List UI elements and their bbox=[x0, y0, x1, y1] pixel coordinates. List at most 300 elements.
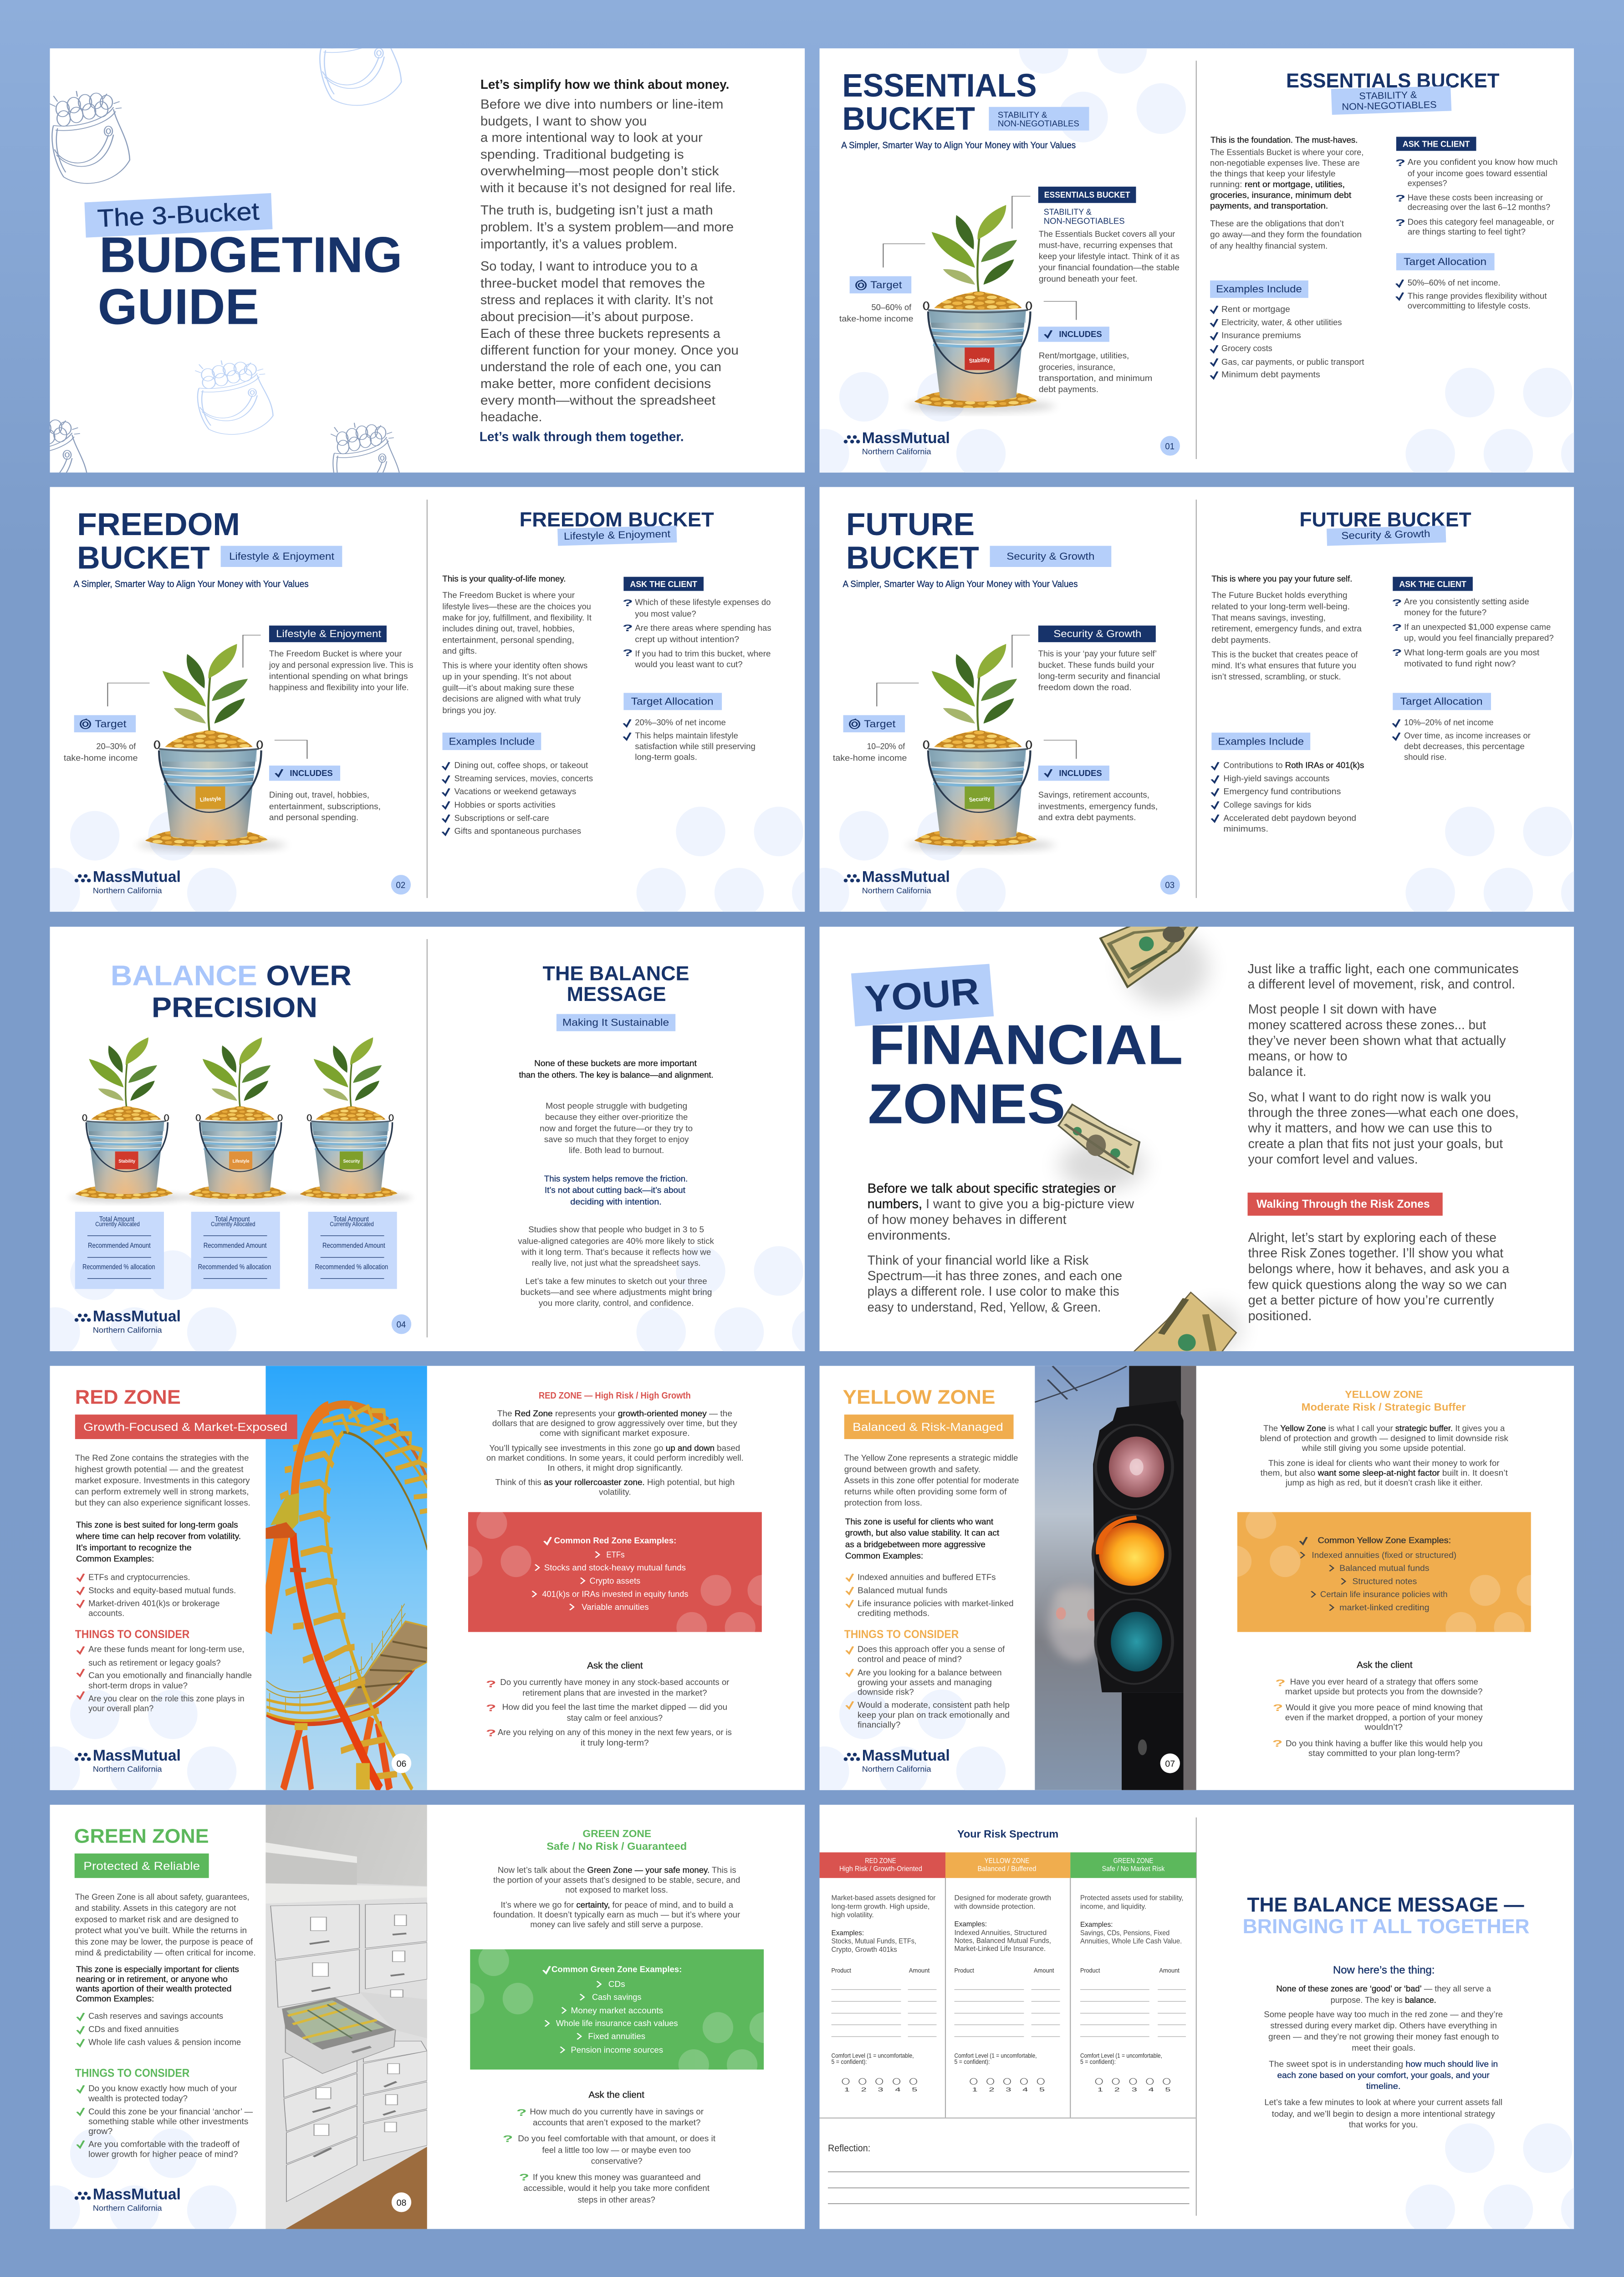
body text: groceries, insurance, minimum debt bbox=[1210, 190, 1352, 200]
three bucket illustrations bbox=[69, 1037, 412, 1203]
ask the client: expenses? bbox=[1408, 179, 1447, 188]
page number: 03 bbox=[1165, 880, 1175, 890]
green column: 5 bbox=[1165, 2087, 1171, 2093]
heading: right page: Security & Growth bbox=[1341, 528, 1430, 541]
red column: Examples: bbox=[832, 1929, 864, 1937]
checklist: common examples: CDs and fixed annuities bbox=[88, 2024, 179, 2034]
right text: Most people I sit down with have bbox=[1248, 1001, 1437, 1016]
heading: Protected & Reliable bbox=[83, 1860, 200, 1872]
zone column headers: Safe / No Market Risk bbox=[1102, 1864, 1165, 1873]
green column bbox=[1080, 1894, 1184, 2093]
connector lines bbox=[877, 635, 1076, 759]
ask the client: Ask the client bbox=[588, 2090, 644, 2100]
body text: market exposure. Investments in this category bbox=[75, 1475, 250, 1485]
yellow column: 5 bbox=[1039, 2087, 1045, 2093]
body text: related to your long-term well-being. bbox=[1211, 602, 1350, 611]
examples include list: Contributions to Roth IRAs or 401(k)s bbox=[1223, 761, 1364, 770]
callout: essentials bucket: ground beneath your feet. bbox=[1039, 274, 1138, 284]
callout: lifestyle and enjoyment: joy and personal expression live. This is bbox=[269, 660, 413, 670]
heading: right page: Lifestyle & Enjoyment bbox=[564, 528, 671, 542]
callout: lifestyle and enjoyment: intentional spending on what brings bbox=[269, 671, 408, 681]
red column: long-term growth. High upside, bbox=[832, 1902, 929, 1910]
body text: protection from loss. bbox=[844, 1498, 922, 1507]
checklist: common examples: crediting methods. bbox=[858, 1608, 929, 1618]
body text: The Future Bucket holds everything bbox=[1211, 590, 1348, 600]
logo bbox=[844, 1746, 950, 1774]
ask the client: stay committed to your plan long-term? bbox=[1308, 1748, 1460, 1758]
yellow column: Designed for moderate growth bbox=[954, 1894, 1051, 1902]
heading bbox=[843, 1386, 1014, 1439]
body text: buckets—and see where adjustments might bring bbox=[521, 1287, 712, 1297]
ask the client: crept up without intention? bbox=[635, 634, 739, 644]
left intro text bbox=[868, 1181, 1134, 1314]
red column: 3 bbox=[878, 2087, 883, 2093]
panel: your risk spectrum and balance message bbox=[820, 1805, 1610, 2234]
green column: 1 bbox=[1098, 2087, 1103, 2093]
allocation card: lifestyle: Recommended % allocation bbox=[198, 1263, 271, 1271]
callout: essentials bucket: ESSENTIALS BUCKET bbox=[1044, 190, 1130, 199]
examples include list bbox=[1210, 281, 1364, 379]
things to consider: such as retirement or legacy goals? bbox=[88, 1658, 221, 1668]
allocation card: security: Total Amount bbox=[333, 1215, 369, 1223]
callout: essentials bucket bbox=[1038, 187, 1180, 284]
closing text bbox=[1248, 1230, 1509, 1323]
title: FINANCIAL bbox=[869, 1013, 1183, 1076]
body text: and stability. Assets in this category are not bbox=[75, 1903, 236, 1913]
panel: red zone bbox=[31, 1366, 805, 1796]
yellow column: Amount bbox=[1034, 1967, 1054, 1974]
yellow column: 5 = confident): bbox=[954, 2058, 990, 2066]
body text: This is where you pay your future self. bbox=[1211, 574, 1352, 583]
ask the client: it truly long-term? bbox=[581, 1738, 649, 1747]
body text: deciding with intention. bbox=[570, 1197, 662, 1206]
heading: OVER bbox=[266, 960, 352, 991]
right intro text: come with significant market exposure. bbox=[540, 1428, 690, 1438]
body text bbox=[518, 1058, 714, 1308]
yellow column: 1 bbox=[972, 2087, 978, 2093]
things to consider: Are you comfortable with the tradeoff of bbox=[88, 2139, 240, 2149]
body text: growth, but also value stability. It can act bbox=[845, 1528, 1000, 1537]
callout: includes: INCLUDES bbox=[1059, 329, 1102, 339]
body text: The Red Zone contains the strategies with the bbox=[75, 1453, 249, 1463]
connector lines bbox=[883, 196, 1076, 320]
things to consider: THINGS TO CONSIDER bbox=[75, 1628, 189, 1640]
green column: 4 bbox=[1149, 2087, 1154, 2093]
body text: Let’s take a few minutes to sketch out your three bbox=[526, 1276, 707, 1286]
heading: the balance message bbox=[1243, 1893, 1530, 1938]
body text: the things that keep your lifestyle bbox=[1210, 169, 1335, 179]
ask the client: ? bbox=[1275, 1678, 1286, 1688]
page number bbox=[1160, 436, 1180, 456]
body text: Most people struggle with budgeting bbox=[546, 1101, 687, 1111]
heading: FUTURE bbox=[846, 507, 975, 542]
right text: balance it. bbox=[1248, 1064, 1307, 1079]
green column: 2 bbox=[1114, 2087, 1120, 2093]
examples include list: Examples Include bbox=[1218, 735, 1304, 747]
target allocation: This helps maintain lifestyle bbox=[635, 731, 738, 740]
callout: includes: transportation, and minimum bbox=[1039, 373, 1152, 383]
panel: common red zone examples bbox=[449, 1508, 778, 1643]
right intro text: Now let’s talk about the Green Zone — your safe money. This is bbox=[498, 1865, 736, 1875]
logo: Northern California bbox=[93, 1765, 162, 1774]
panel: essentials bucket bbox=[800, 24, 1610, 479]
heading bbox=[841, 67, 1089, 151]
body text: The Freedom Bucket is where your bbox=[442, 590, 575, 600]
logo: MassMutual bbox=[93, 868, 181, 885]
ask the client: ? bbox=[516, 2108, 527, 2118]
body text: because they either over-prioritize the bbox=[545, 1112, 688, 1122]
body text: It’s not about cutting back—it’s about bbox=[545, 1185, 685, 1195]
things to consider: grow? bbox=[88, 2126, 112, 2136]
heading: A Simpler, Smarter Way to Align Your Money with Your Values bbox=[843, 579, 1078, 589]
title: GUIDE bbox=[98, 279, 259, 335]
body text: mind. It’s what ensures that future you bbox=[1211, 661, 1356, 670]
green column: 5 = confident): bbox=[1080, 2058, 1116, 2066]
body text: That means savings, investing, bbox=[1211, 613, 1326, 623]
body text: exposed to market risk and are designed to bbox=[75, 1915, 239, 1924]
body text bbox=[442, 574, 592, 715]
heading: BALANCE bbox=[111, 960, 257, 991]
ask the client: steps in other areas? bbox=[578, 2195, 655, 2205]
panel: common green zone examples: Fixed annuities bbox=[588, 2032, 645, 2041]
body text bbox=[75, 1892, 256, 2003]
panel: cover The 3-Bucket Budgeting Guide bbox=[10, 13, 805, 504]
red column bbox=[832, 1894, 935, 2093]
callout: includes bbox=[269, 766, 381, 822]
red column: 5 = confident): bbox=[832, 2058, 867, 2066]
body text: and gifts. bbox=[442, 646, 477, 656]
body text: It’s important to recognize the bbox=[76, 1543, 192, 1552]
right intro text: them, but also want some sleep-at-night factor built in. It doesn’t bbox=[1261, 1468, 1508, 1478]
body text: wants aportion of their wealth protected bbox=[76, 1984, 231, 1993]
callout: includes: Savings, retirement accounts, bbox=[1038, 790, 1149, 800]
red column: 5 bbox=[912, 2087, 918, 2093]
body text: of any healthy financial system. bbox=[1210, 241, 1328, 250]
body text: isn’t stressed, scrambling, or stuck. bbox=[1211, 672, 1341, 681]
examples include list: Rent or mortgage bbox=[1221, 304, 1290, 314]
title bbox=[851, 964, 1183, 1135]
body text: includes dining out, travel, hobbies, bbox=[442, 624, 575, 633]
things to consider: Can you emotionally and financially handle bbox=[88, 1670, 252, 1680]
ask the client: money for the future? bbox=[1404, 608, 1486, 617]
heading: RED ZONE bbox=[75, 1386, 181, 1409]
reflection lines: Reflection: bbox=[828, 2143, 870, 2154]
red column: 4 bbox=[895, 2087, 901, 2093]
examples include list: Grocery costs bbox=[1221, 343, 1272, 353]
heading: Growth-Focused & Market-Exposed bbox=[83, 1421, 287, 1434]
right intro text bbox=[1260, 1389, 1508, 1487]
body text bbox=[844, 1453, 1019, 1561]
left intro text: Spectrum—it has three zones, and each one bbox=[868, 1268, 1122, 1283]
heading: the balance message: MESSAGE bbox=[567, 983, 666, 1006]
panel: common green zone examples: Common Green Zone Examples: bbox=[552, 1965, 682, 1974]
heading: right page bbox=[1286, 69, 1500, 115]
checklist: common examples: Whole life cash values & pension income bbox=[88, 2037, 241, 2047]
callout: walking through the risk zones: Walking Through the Risk Zones bbox=[1256, 1198, 1430, 1210]
panel: common yellow zone examples: Indexed annuities (fixed or structured) bbox=[1312, 1550, 1456, 1560]
callout: walking through the risk zones bbox=[1247, 1193, 1443, 1216]
allocation card: security: Recommended % allocation bbox=[315, 1263, 388, 1271]
left intro text: plays a different role. I use color to make this bbox=[868, 1284, 1119, 1299]
body text: running: rent or mortgage, utilities, bbox=[1210, 179, 1345, 189]
zone column headers: RED ZONE bbox=[865, 1857, 896, 1865]
heading: right page bbox=[1299, 508, 1471, 546]
worksheet title: Your Risk Spectrum bbox=[957, 1828, 1058, 1840]
left intro text: of how money behaves in different bbox=[868, 1212, 1067, 1227]
allocation card: security: Recommended Amount bbox=[322, 1241, 385, 1250]
callout: includes: INCLUDES bbox=[1059, 768, 1102, 778]
heading: Security & Growth bbox=[1006, 551, 1094, 562]
things to consider: lower growth for higher peace of mind? bbox=[88, 2149, 238, 2159]
intro text bbox=[480, 77, 739, 444]
checklist: common examples: Indexed annuities and buffered ETFs bbox=[858, 1572, 996, 1582]
body text: The sweet spot is in understanding how much should live in bbox=[1269, 2059, 1498, 2069]
title: BUDGETING bbox=[99, 227, 403, 283]
panel: common green zone examples: Pension income sources bbox=[571, 2045, 663, 2055]
bucket illustration: Security bbox=[969, 795, 991, 803]
right intro text bbox=[486, 1390, 744, 1497]
right intro text: You’ll typically see investments in this zone go up and down based bbox=[489, 1443, 740, 1453]
target allocation bbox=[1396, 253, 1547, 311]
examples include list: Examples Include bbox=[449, 735, 535, 747]
panel: common yellow zone examples: Structured notes bbox=[1352, 1577, 1417, 1586]
body text: Common Examples: bbox=[76, 1554, 154, 1563]
title: The 3-Bucket bbox=[97, 198, 260, 232]
callout: includes: Dining out, travel, hobbies, bbox=[269, 790, 369, 800]
body text: with it long term. That’s because it reflects how we bbox=[521, 1247, 711, 1257]
callout: essentials bucket: The Essentials Bucket covers all your bbox=[1039, 229, 1175, 239]
heading: Balanced & Risk-Managed bbox=[853, 1421, 1003, 1434]
body text: Now here’s the thing: bbox=[1333, 1964, 1435, 1976]
things to consider: Are these funds meant for long-term use, bbox=[88, 1644, 245, 1654]
yellow column: 3 bbox=[1006, 2087, 1011, 2093]
ask the client bbox=[1395, 137, 1558, 236]
ask the client: Ask the client bbox=[1357, 1660, 1413, 1670]
body text: Common Examples: bbox=[76, 1994, 154, 2003]
body text: that works for you. bbox=[1349, 2119, 1418, 2129]
body text bbox=[1211, 574, 1362, 681]
three bucket illustrations: Stability bbox=[118, 1159, 135, 1164]
body text: really live, not just what the spreadsheet says. bbox=[532, 1258, 700, 1268]
target allocation: 20%–30% of net income bbox=[635, 718, 726, 727]
right intro text: Think of this as your rollercoaster zone. High potential, but high bbox=[495, 1477, 735, 1487]
examples include list bbox=[442, 733, 593, 836]
body text: payments, and transportation. bbox=[1210, 201, 1328, 210]
heading: BUCKET bbox=[842, 100, 975, 137]
yellow column: Examples: bbox=[954, 1920, 987, 1928]
red column: Crypto, Growth 401ks bbox=[832, 1945, 897, 1953]
right intro text: The Red Zone represents your growth-oriented money — the bbox=[497, 1409, 732, 1418]
examples include list: Electricity, water, & other utilities bbox=[1221, 317, 1342, 327]
ask the client: ? bbox=[486, 1679, 496, 1690]
panel: common red zone examples: Crypto assets bbox=[590, 1576, 640, 1586]
page number: 07 bbox=[1165, 1758, 1175, 1769]
allocation card: stability bbox=[75, 1212, 164, 1289]
callout: includes: groceries, insurance, bbox=[1039, 362, 1115, 372]
logo: MassMutual bbox=[862, 1746, 950, 1764]
panel: common red zone examples: Variable annuities bbox=[582, 1602, 649, 1612]
logo: MassMutual bbox=[862, 429, 950, 446]
intro text: budgets, I want to show you bbox=[480, 114, 647, 128]
ask the client: ? bbox=[486, 1728, 496, 1739]
body text: Assets in this zone offer potential for moderate bbox=[844, 1475, 1019, 1485]
body text: make for joy, fulfillment, and flexibility. It bbox=[442, 613, 592, 623]
body text: timeline. bbox=[1366, 2081, 1401, 2091]
callout: includes: investments, emergency funds, bbox=[1038, 802, 1158, 811]
body text: but they can also experience significant losses. bbox=[75, 1498, 250, 1507]
intro text: headache. bbox=[480, 409, 542, 424]
heading: A Simpler, Smarter Way to Align Your Money with Your Values bbox=[74, 579, 309, 589]
panel: common green zone examples: Whole life insurance cash values bbox=[556, 2018, 678, 2028]
callout: lifestyle and enjoyment: The Freedom Bucket is where your bbox=[269, 649, 402, 659]
ask the client: ? bbox=[1392, 623, 1402, 633]
ask the client: ? bbox=[623, 598, 633, 608]
body text: brings you joy. bbox=[442, 705, 496, 715]
target allocation: 10%–20% of net income bbox=[1404, 718, 1493, 727]
title: YOUR bbox=[863, 970, 981, 1021]
panel: balance over precision bbox=[31, 927, 841, 1357]
ask the client: conservative? bbox=[591, 2156, 643, 2166]
right intro text: The Yellow Zone is what I call your strategic buffer. It gives you a bbox=[1263, 1424, 1505, 1433]
callout: target bbox=[839, 276, 914, 323]
examples include list: Subscriptions or self-care bbox=[454, 813, 549, 823]
body text: where time can help recover from volatility. bbox=[76, 1532, 241, 1541]
body text: non-negotiable expenses live. These are bbox=[1210, 158, 1360, 168]
ask the client: ? bbox=[486, 1703, 496, 1714]
target allocation bbox=[623, 693, 756, 762]
callout: lifestyle and enjoyment: Lifestyle & Enjoyment bbox=[276, 628, 381, 639]
ask the client: ? bbox=[623, 648, 633, 658]
left intro text: numbers, I want to give you a big-picture view bbox=[868, 1196, 1134, 1211]
body text: This is where your identity often shows bbox=[442, 661, 587, 670]
heading: GREEN ZONE bbox=[74, 1825, 209, 1847]
things to consider: your overall plan? bbox=[88, 1704, 153, 1713]
panel: common red zone examples: 401(k)s or IRAs invested in equity funds bbox=[542, 1589, 688, 1599]
things to consider: short-term drops in value? bbox=[88, 1681, 188, 1690]
photo: rollercoaster bbox=[265, 1366, 427, 1790]
green column: Examples: bbox=[1080, 1920, 1113, 1928]
panel: common yellow zone examples: market-linked crediting bbox=[1339, 1603, 1429, 1612]
icon: line-art coin pots bbox=[10, 13, 401, 504]
heading bbox=[111, 960, 352, 1023]
right intro text: Safe / No Risk / Guaranteed bbox=[546, 1841, 687, 1853]
red column: Comfort Level (1 = uncomfortable, bbox=[832, 2052, 914, 2059]
body text bbox=[1210, 135, 1364, 250]
ask the client: ? bbox=[1392, 648, 1402, 658]
things to consider: downside risk? bbox=[858, 1687, 914, 1697]
callout: target: take-home income bbox=[833, 753, 907, 763]
heading: PRECISION bbox=[152, 991, 317, 1023]
body text: guilt—it’s about making sure these bbox=[442, 683, 574, 693]
left intro text: environments. bbox=[868, 1228, 951, 1242]
body text: This system helps remove the friction. bbox=[544, 1174, 688, 1184]
callout: target: 10–20% of bbox=[867, 741, 905, 751]
logo: Northern California bbox=[862, 887, 931, 895]
page number bbox=[1160, 1753, 1180, 1773]
things to consider: something stable while other investments bbox=[88, 2117, 248, 2126]
things to consider: wealth is protected today? bbox=[88, 2093, 188, 2103]
ask the client: ASK THE CLIENT bbox=[1403, 139, 1470, 149]
bucket illustration: Stability bbox=[969, 357, 991, 364]
panel: green zone bbox=[31, 1805, 805, 2235]
body text: life. Both lead to burnout. bbox=[569, 1145, 664, 1155]
yellow column: 2 bbox=[989, 2087, 994, 2093]
heading: the balance message: THE BALANCE bbox=[543, 962, 689, 985]
ask the client bbox=[503, 2090, 715, 2205]
bucket illustration bbox=[907, 644, 1055, 851]
ask the client: ? bbox=[1395, 193, 1405, 204]
things to consider: THINGS TO CONSIDER bbox=[844, 1628, 959, 1640]
examples include list: Accelerated debt paydown beyond bbox=[1223, 813, 1356, 823]
checklist: common examples: accounts. bbox=[88, 1608, 124, 1618]
callout: essentials bucket: your financial foundation—the stable bbox=[1039, 263, 1180, 272]
reflection lines bbox=[828, 2143, 1190, 2204]
ask the client: ? bbox=[503, 2134, 513, 2144]
logo: MassMutual bbox=[93, 2185, 181, 2203]
body text: This is the bucket that creates peace of bbox=[1211, 650, 1358, 659]
target allocation: Target Allocation bbox=[631, 695, 714, 707]
body text: now and forget the future—or they try to bbox=[540, 1123, 693, 1133]
body text: protect what you’ve built. While the returns in bbox=[75, 1925, 247, 1935]
things to consider bbox=[844, 1628, 1010, 1730]
body text: The Essentials Bucket is where your core, bbox=[1210, 148, 1364, 157]
body text: None of these buckets are more important bbox=[534, 1058, 697, 1068]
right intro text bbox=[493, 1828, 740, 1929]
green column: Savings, CDs, Pensions, Fixed bbox=[1080, 1929, 1169, 1937]
panel: common yellow zone examples: Balanced mutual funds bbox=[1339, 1563, 1429, 1573]
callout: essentials bucket: must-have, recurring expenses that bbox=[1039, 240, 1173, 250]
body text: This zone is useful for clients who want bbox=[845, 1517, 994, 1527]
body text: decisions are aligned with what truly bbox=[442, 694, 581, 704]
checklist: common examples: Market-driven 401(k)s or brokerage bbox=[88, 1598, 220, 1608]
heading bbox=[74, 507, 342, 589]
red column: 1 bbox=[844, 2087, 850, 2093]
yellow column: Indexed Annuities, Structured bbox=[954, 1929, 1047, 1936]
heading: FREEDOM bbox=[77, 507, 240, 542]
heading: BUCKET bbox=[77, 540, 210, 575]
icon: dollar bills bbox=[1058, 925, 1240, 1354]
checklist: common examples: Cash reserves and savings accounts bbox=[88, 2011, 223, 2021]
callout: target: take-home income bbox=[839, 314, 914, 323]
logo bbox=[75, 1307, 181, 1334]
panel: common red zone examples: Stocks and stock-heavy mutual funds bbox=[544, 1562, 686, 1572]
allocation card: lifestyle: Currently Allocated bbox=[211, 1221, 255, 1228]
bucket illustration: Lifestyle bbox=[199, 795, 222, 803]
page number bbox=[392, 1753, 411, 1773]
ask the client: ? bbox=[623, 623, 633, 633]
things to consider: Are you clear on the role this zone plays in bbox=[88, 1694, 245, 1703]
things to consider: growing your assets and managing bbox=[858, 1678, 992, 1687]
body text: highest growth potential — and the greatest bbox=[75, 1465, 244, 1474]
body text: mind & predictability — often critical for income. bbox=[75, 1948, 256, 1957]
heading: the balance message: Making It Sustainable bbox=[562, 1016, 669, 1028]
logo bbox=[75, 1746, 181, 1774]
callout: lifestyle and enjoyment bbox=[269, 626, 413, 692]
ask the client: stay calm or feel anxious? bbox=[567, 1713, 663, 1723]
callout: includes bbox=[1038, 766, 1158, 822]
things to consider: Are you looking for a balance between bbox=[858, 1668, 1002, 1677]
green column: Protected assets used for stability, bbox=[1080, 1894, 1184, 1902]
closing text: positioned. bbox=[1248, 1308, 1312, 1323]
ask the client bbox=[1272, 1660, 1483, 1758]
green column: Comfort Level (1 = uncomfortable, bbox=[1080, 2052, 1162, 2059]
callout: essentials bucket: STABILITY & bbox=[1044, 207, 1092, 217]
heading: BUCKET bbox=[846, 540, 979, 575]
ask the client: ASK THE CLIENT bbox=[630, 579, 697, 589]
ask the client: are things starting to feel tight? bbox=[1408, 227, 1526, 236]
red column: high volatility. bbox=[832, 1911, 874, 1919]
page number bbox=[1160, 875, 1180, 894]
